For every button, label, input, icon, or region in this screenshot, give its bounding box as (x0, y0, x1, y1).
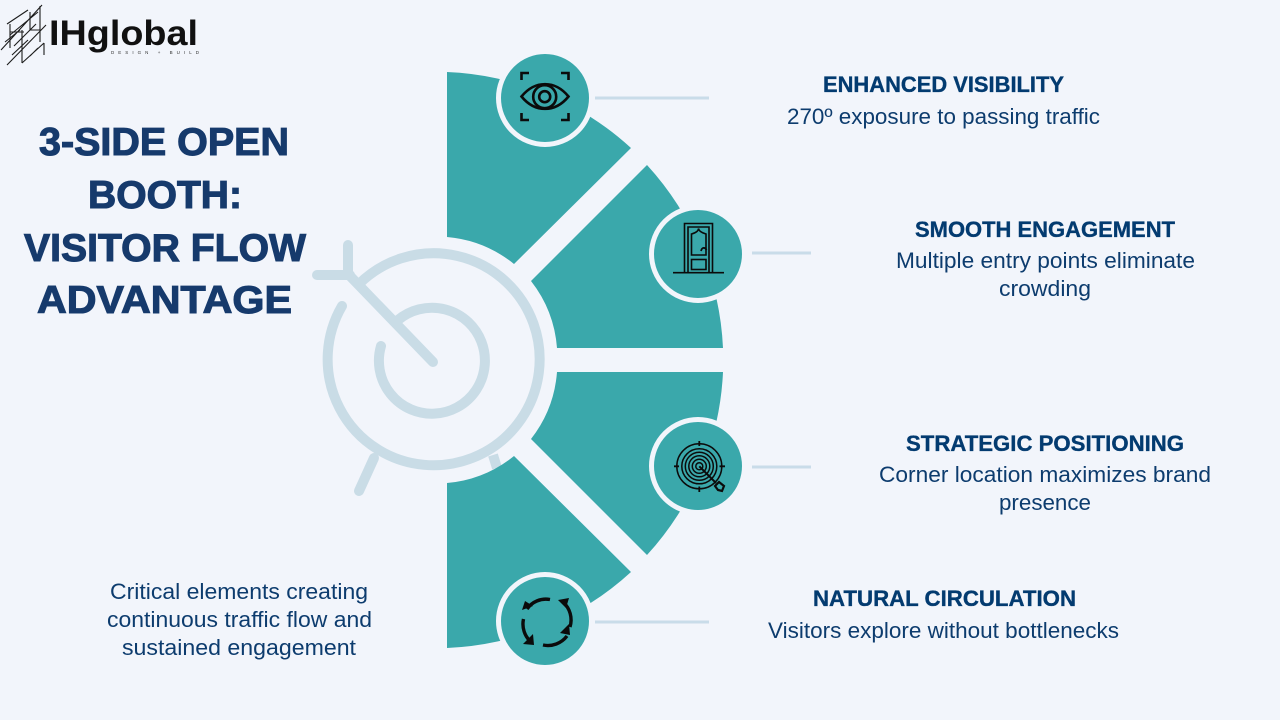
icon: eye (498, 52, 592, 144)
description: Multiple entry points eliminate (896, 248, 1195, 273)
logo mark: hatched lines (1, 5, 46, 65)
text block: natural circulation (768, 586, 1119, 643)
heading: SMOOTH ENGAGEMENT (915, 217, 1176, 242)
sector: upper right (531, 165, 723, 348)
text block: summary note: Critical elements creating (110, 579, 368, 604)
description: presence (999, 490, 1091, 515)
heading: ENHANCED VISIBILITY (823, 72, 1064, 97)
text block: enhanced visibility (787, 72, 1100, 129)
sector: top (447, 72, 631, 264)
connector lines (595, 98, 811, 622)
logo tagline: DESIGN + BUILD (111, 50, 200, 55)
text block: summary note (107, 579, 372, 660)
icon: target rings (652, 420, 744, 512)
icon: circular arrows (498, 574, 592, 668)
text block: strategic positioning (879, 431, 1211, 515)
text block: smooth engagement (896, 217, 1195, 301)
title: 3-SIDE OPEN (39, 121, 289, 164)
icon: central target with arrow (317, 245, 540, 491)
description (896, 248, 1195, 301)
title: BOOTH: (88, 174, 242, 217)
title (24, 121, 306, 322)
icon: door (652, 208, 744, 300)
panel: radial sectors (447, 72, 723, 648)
text block: summary note: continuous traffic flow and (107, 607, 372, 632)
logo wordmark: IHglobal (49, 14, 198, 53)
heading: STRATEGIC POSITIONING (906, 431, 1184, 456)
sector: bottom (447, 456, 631, 648)
sector: lower right (531, 372, 723, 555)
description: Corner location maximizes brand (879, 462, 1211, 487)
title: VISITOR FLOW (24, 227, 306, 270)
text block: summary note: sustained engagement (122, 635, 356, 660)
heading: NATURAL CIRCULATION (813, 586, 1076, 611)
description (879, 462, 1211, 515)
title: ADVANTAGE (37, 279, 292, 322)
description: crowding (999, 276, 1091, 301)
description: Visitors explore without bottlenecks (768, 618, 1119, 643)
logo: IHglobal (1, 5, 200, 65)
description: 270º exposure to passing traffic (787, 104, 1100, 129)
